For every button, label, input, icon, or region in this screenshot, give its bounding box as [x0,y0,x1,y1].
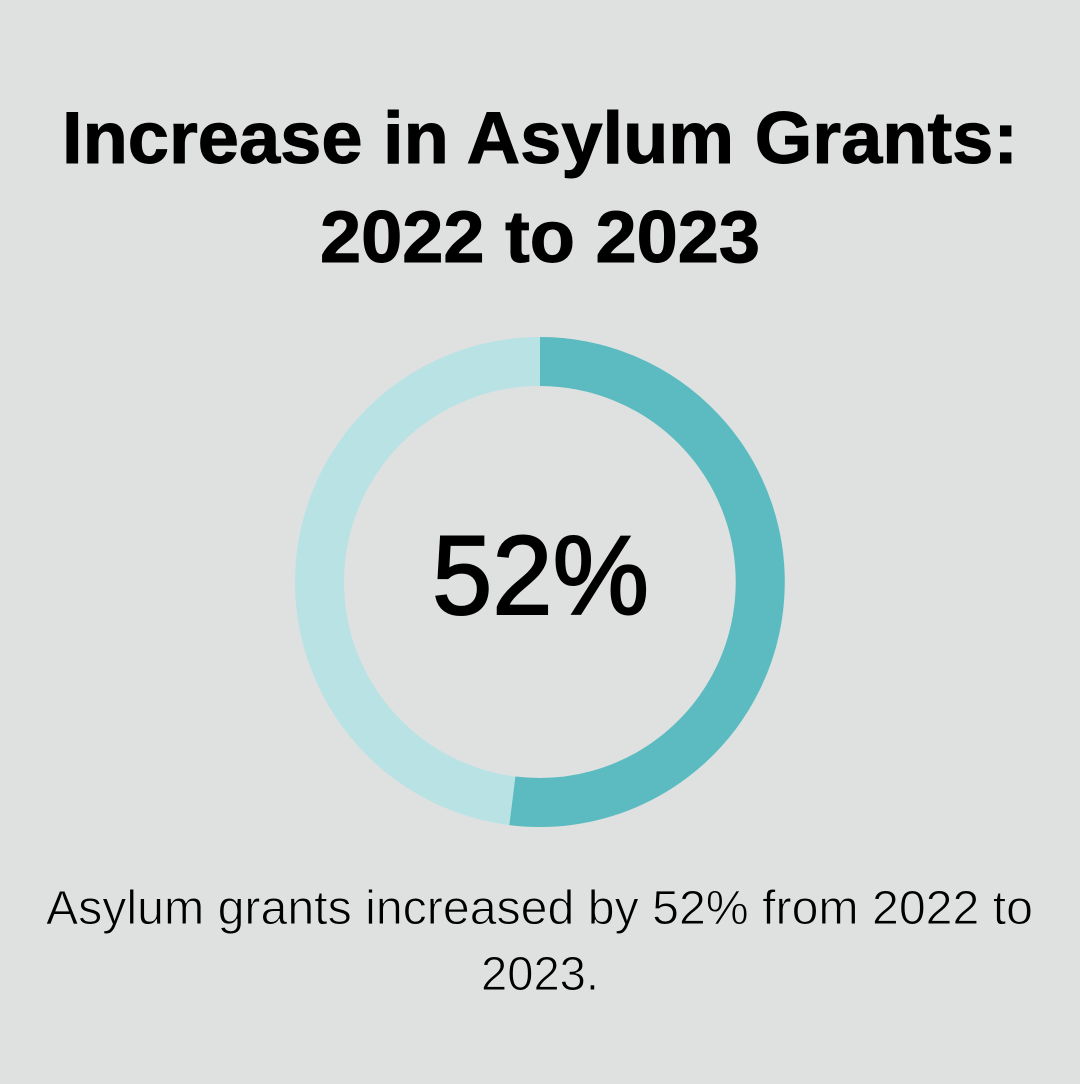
center value: 52% [432,513,649,638]
donut chart: 52% [320,362,760,802]
title: Increase in Asylum Grants: [62,98,1018,179]
caption: 2023. [481,948,599,1001]
title: 2022 to 2023 [320,197,760,278]
caption [46,882,1033,1001]
caption: Asylum grants increased by 52% from 2022 to [46,882,1033,935]
title [62,98,1018,278]
